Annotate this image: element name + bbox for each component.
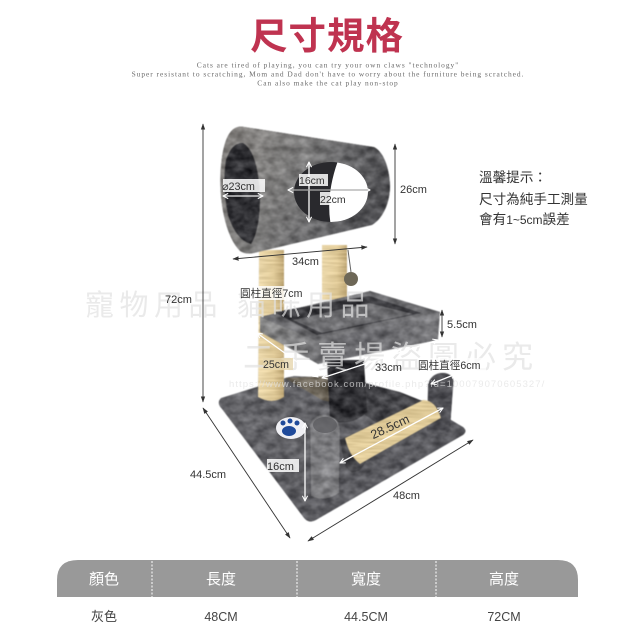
arrow: tunnel height <box>394 144 396 244</box>
arrow: width <box>308 440 473 541</box>
dimension labels: 25cm <box>263 359 289 371</box>
platform <box>260 291 440 364</box>
dimension labels: 16cm <box>299 175 325 187</box>
cat tree product photo <box>219 127 466 522</box>
centre dark post <box>327 360 367 423</box>
tunnel window <box>294 162 368 222</box>
subtitle text block: Super resistant to scratching, Mom and Dad don't have to worry about the furniture being scratched. <box>132 70 524 78</box>
watermark <box>85 289 545 390</box>
header labels: 寬度 <box>351 570 381 588</box>
table row values: 72CM <box>487 610 521 624</box>
arrow: platform height <box>441 310 443 337</box>
back grey post <box>427 373 454 434</box>
white dimension arrows <box>223 162 456 501</box>
table row values <box>91 609 521 624</box>
dimension labels: 圓柱直徑7cm <box>240 287 303 300</box>
dimension labels: 28.5cm <box>368 412 412 442</box>
table row values: 灰色 <box>91 609 117 624</box>
hanging ball toy <box>344 250 358 286</box>
header labels: 顏色 <box>89 570 119 588</box>
dimension labels: 16cm <box>267 461 294 473</box>
note text block: 會有1~5cm誤差 <box>479 211 570 227</box>
dimension labels: 44.5cm <box>190 469 226 481</box>
note text block: 尺寸為純手工測量 <box>479 192 588 207</box>
dimension arrows <box>203 124 473 541</box>
base plate <box>219 376 466 522</box>
dimension labels: 5.5cm <box>447 319 477 331</box>
header labels <box>89 570 519 588</box>
dimension labels: 34cm <box>292 256 319 268</box>
right sisal post <box>322 245 347 300</box>
watermark: 二手賣場盜圖必究 <box>243 340 539 375</box>
dimension labels: 33cm <box>375 362 402 374</box>
dimension labels: ⌀23cm <box>222 181 255 193</box>
dimension labels: 圓柱直徑6cm <box>418 359 481 372</box>
dimension labels: 26cm <box>400 184 427 196</box>
left sisal post <box>258 250 284 401</box>
paw print badge <box>276 417 306 439</box>
watermark: 貓咪用品 <box>237 289 375 322</box>
front grey post <box>310 415 340 499</box>
sisal roller <box>340 400 441 472</box>
arrow: depth <box>203 408 290 538</box>
subtitle text block <box>132 60 524 88</box>
arrow: tunnel length <box>233 247 367 259</box>
header labels: 長度 <box>206 571 236 588</box>
header labels: 高度 <box>489 571 519 588</box>
arrow: total height <box>202 124 204 402</box>
table header bar <box>57 560 578 597</box>
tunnel <box>220 127 390 254</box>
dimension labels <box>165 174 486 502</box>
watermark: https://www.facebook.com/profile.php?id=100079070605327/ <box>229 379 545 390</box>
dimension labels: 72cm <box>165 294 192 306</box>
tunnel end opening <box>224 143 260 244</box>
dimension labels: 22cm <box>320 194 346 206</box>
header dividers <box>152 561 436 597</box>
note text block <box>479 170 588 227</box>
note text block: 溫馨提示： <box>479 170 547 185</box>
dimension labels: 48cm <box>393 490 420 502</box>
subtitle text block: Can also make the cat play non-stop <box>257 78 399 88</box>
watermark: 寵物用品 <box>85 289 223 322</box>
table row values: 44.5CM <box>344 610 388 624</box>
title: 尺寸規格 <box>250 15 404 57</box>
subtitle text block: Cats are tired of playing, you can try your own claws "technology" <box>197 60 459 70</box>
table row values: 48CM <box>204 610 238 624</box>
specification table <box>57 560 578 624</box>
